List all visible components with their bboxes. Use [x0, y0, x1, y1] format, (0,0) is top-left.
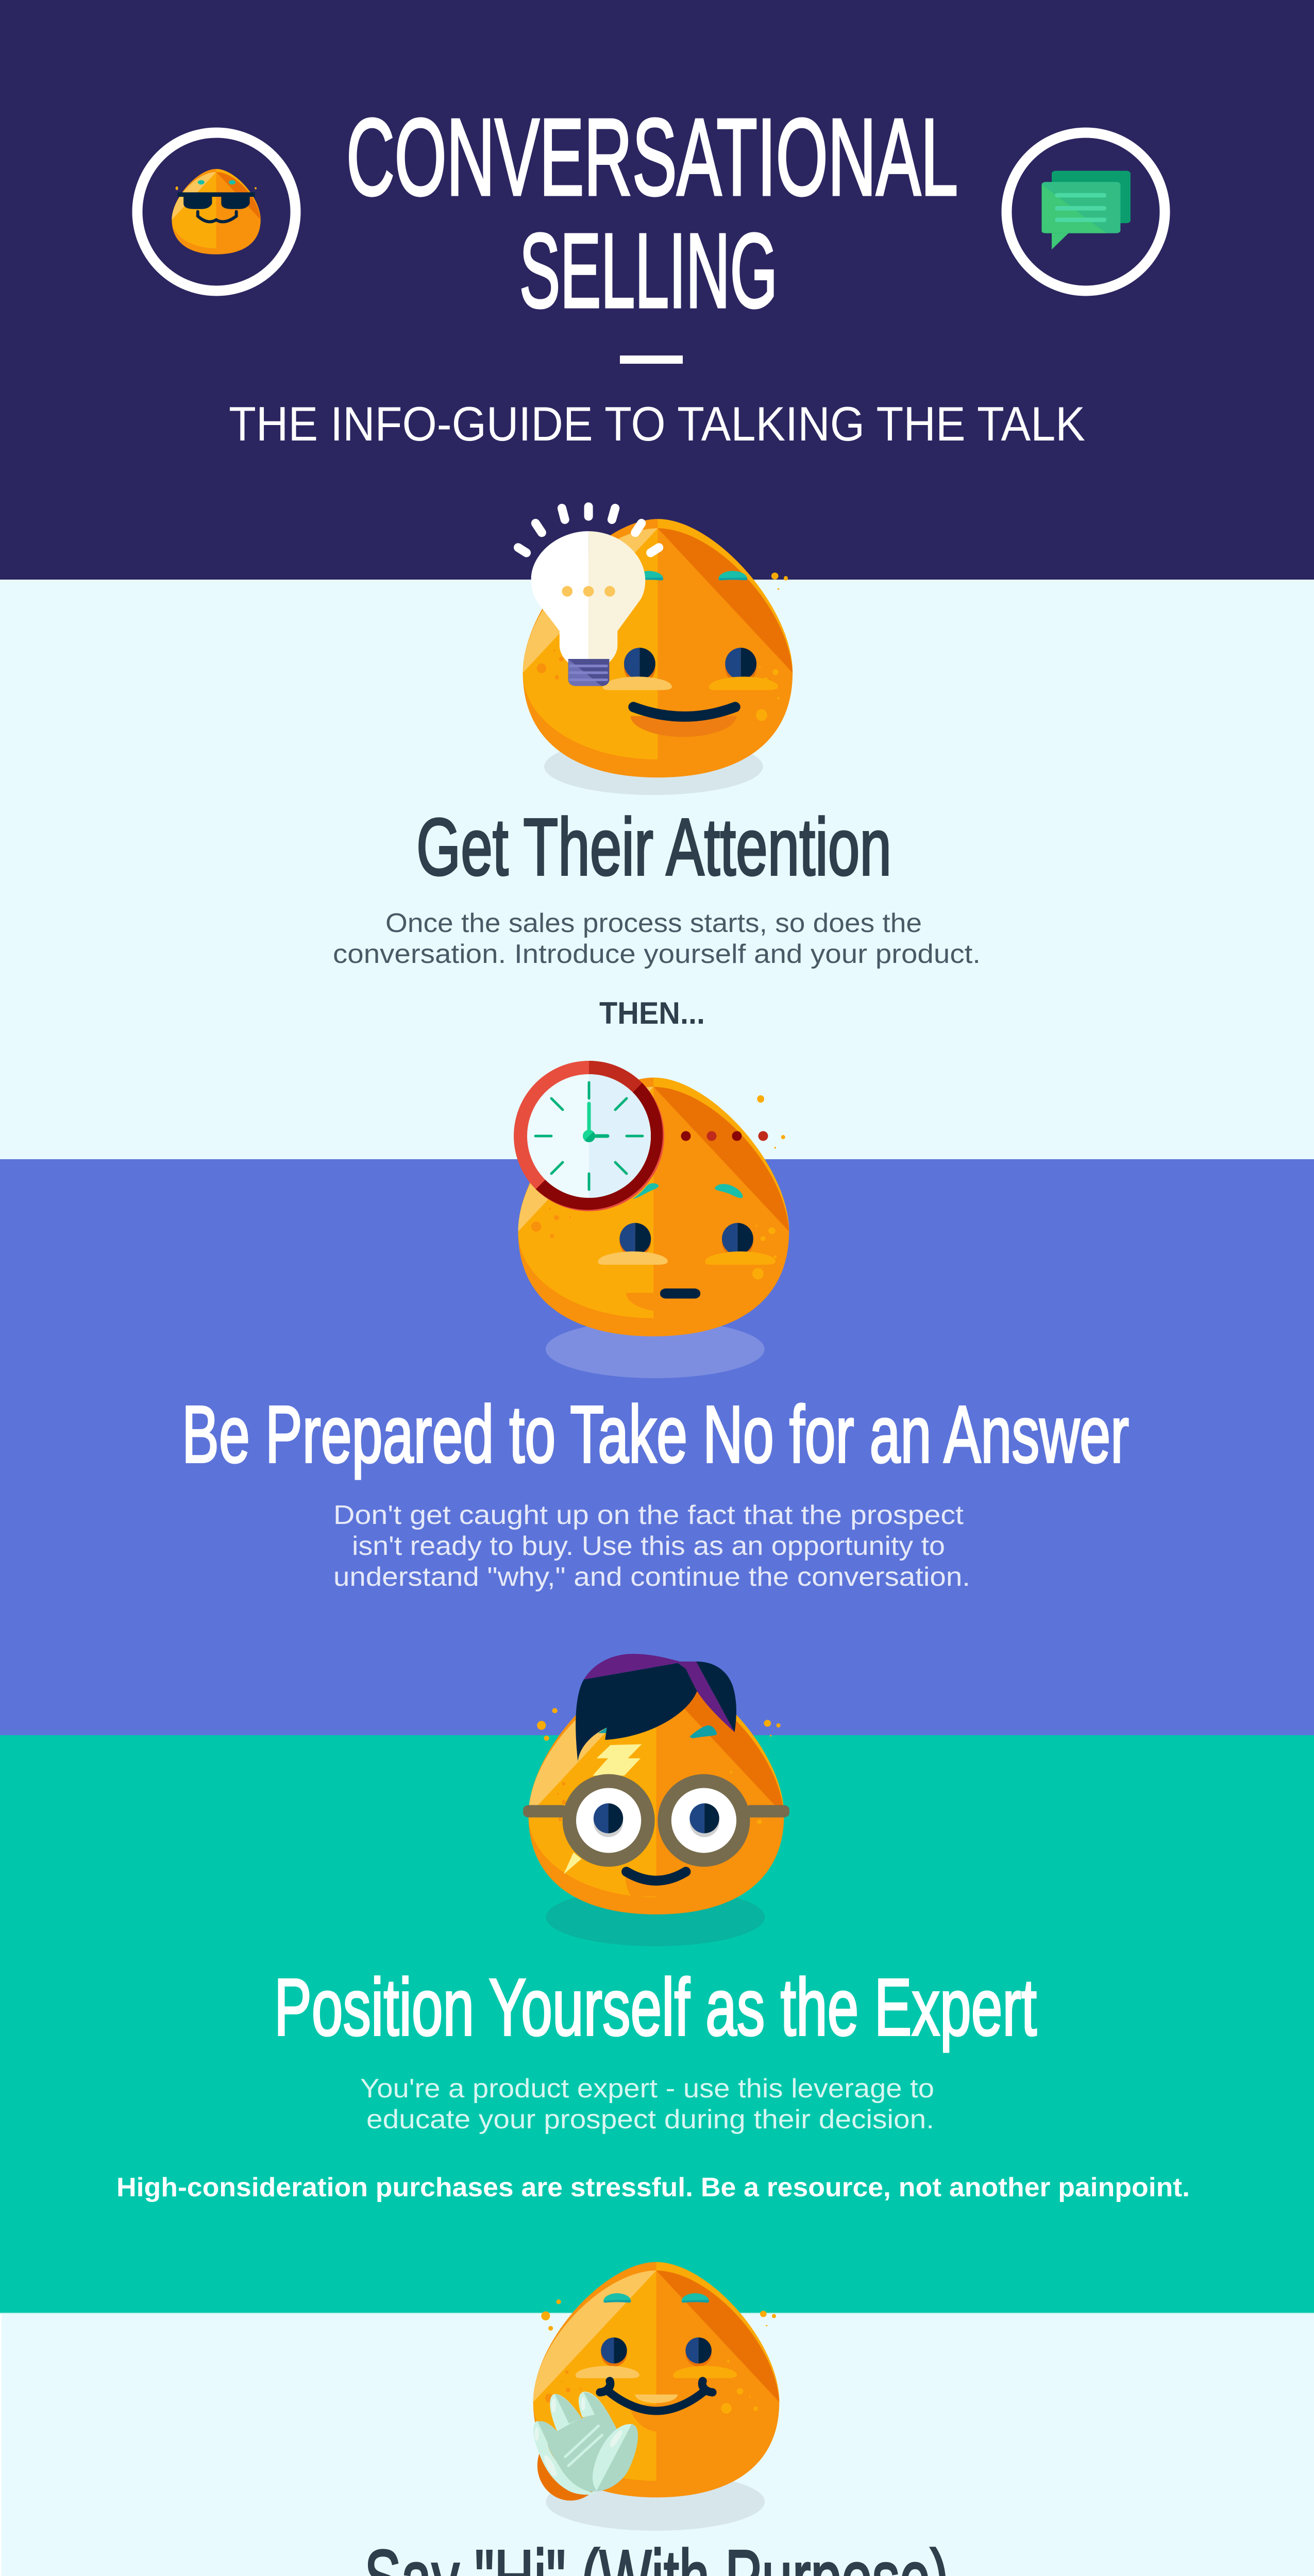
icon: red dots: [681, 1131, 768, 1141]
text: be prepared body: understand "why," and continue the conversation.: [333, 1562, 970, 1592]
title: [346, 96, 958, 330]
egg: light bulb character: [518, 507, 793, 795]
icon: hair: [576, 1654, 736, 1761]
text: then: THEN...: [599, 996, 705, 1030]
panel: get their attention background: [0, 580, 1314, 1159]
egg: expert character with glasses: [523, 1654, 789, 1946]
text: be prepared body: [333, 1500, 970, 1592]
text: get their attention body: conversation. Introduce yourself and your product.: [333, 939, 981, 969]
text: be prepared body: isn't ready to buy. Use this as an opportunity to: [352, 1531, 945, 1561]
icon: chat bubbles in circle: [1007, 133, 1165, 291]
text: bold callout: High-consideration purchases are stressful. Be a resource, not another painpoint.: [116, 2173, 1190, 2202]
icon: sunglasses egg in circle: [137, 133, 296, 291]
panel: be prepared background: [0, 1159, 1314, 1735]
title dash: [620, 355, 683, 364]
text: get their attention body: [333, 908, 981, 969]
panel: say hi background: [0, 2313, 1314, 2576]
egg: clock character: [514, 1061, 789, 1378]
text: be prepared body: Don't get caught up on the fact that the prospect: [333, 1500, 964, 1530]
icon: glasses: [523, 1774, 789, 1867]
heading: get their attention: Get Their Attention: [416, 802, 891, 892]
text: position yourself body: [360, 2074, 934, 2134]
panel: header background: [0, 0, 1314, 580]
icon: light bulb: [518, 507, 659, 686]
panel: position yourself background: [0, 1735, 1314, 2313]
text: position yourself body: You're a product expert - use this leverage to: [360, 2074, 934, 2104]
text: get their attention body: Once the sales process starts, so does the: [385, 908, 922, 938]
egg: waving character: [533, 2262, 779, 2531]
icon: clock: [514, 1061, 664, 1211]
text: position yourself body: educate your prospect during their decision.: [366, 2105, 934, 2134]
icon: waving hand: [533, 2392, 638, 2495]
subtitle: THE INFO-GUIDE TO TALKING THE TALK: [229, 397, 1085, 451]
title: SELLING: [519, 212, 778, 330]
